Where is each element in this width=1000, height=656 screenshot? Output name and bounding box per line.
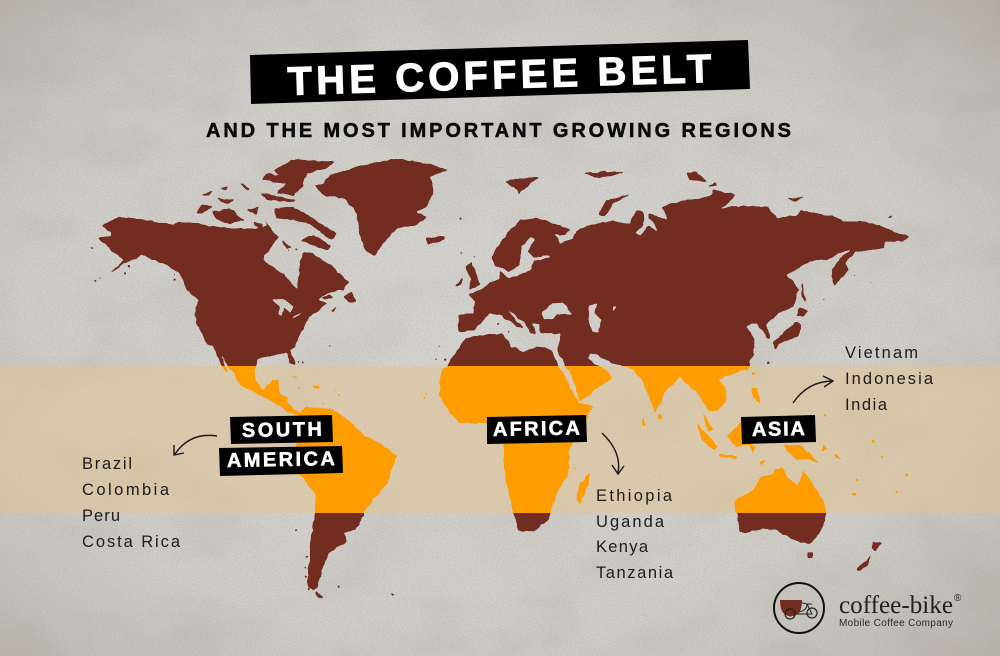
list: South America countries	[82, 455, 181, 551]
label: Asia: ASIA	[752, 418, 805, 441]
subtitle: AND THE MOST IMPORTANT GROWING REGIONS	[206, 120, 791, 142]
arrow: Asia	[793, 376, 833, 403]
list: Asia countries: Vietnam	[845, 344, 918, 362]
list: Asia countries: India	[845, 396, 888, 414]
list: Africa countries: Kenya	[596, 538, 649, 556]
arrow: South America	[174, 435, 217, 455]
coffee belt band	[0, 366, 1000, 513]
list: Africa countries: Ethiopia	[596, 487, 673, 505]
label: South America: SOUTH	[242, 419, 322, 442]
logo: coffee-bike: Mobile Coffee Company	[839, 618, 953, 629]
list: Africa countries: Tanzania	[596, 564, 674, 582]
list: South America countries: Costa Rica	[82, 533, 181, 551]
title: THE COFFEE BELT	[287, 47, 712, 104]
list: Africa countries: Uganda	[596, 513, 665, 531]
world map	[89, 158, 909, 599]
list: South America countries: Colombia	[82, 481, 170, 499]
logo: coffee-bike: coffee-bike	[839, 592, 953, 619]
list: Asia countries: Indonesia	[845, 370, 934, 388]
logo: coffee-bike: ®	[954, 593, 962, 604]
list: Asia countries	[845, 344, 934, 414]
label: South America: AMERICA	[227, 448, 335, 472]
list: Africa countries	[596, 487, 674, 582]
icon: cup on bike	[774, 583, 824, 633]
logo: coffee-bike	[774, 583, 962, 633]
label: Asia	[741, 415, 816, 444]
arrow: Africa	[602, 433, 624, 474]
label: Africa: AFRICA	[493, 417, 580, 441]
list: South America countries: Peru	[82, 507, 120, 525]
label: South America	[219, 415, 343, 476]
list: South America countries: Brazil	[82, 455, 132, 473]
